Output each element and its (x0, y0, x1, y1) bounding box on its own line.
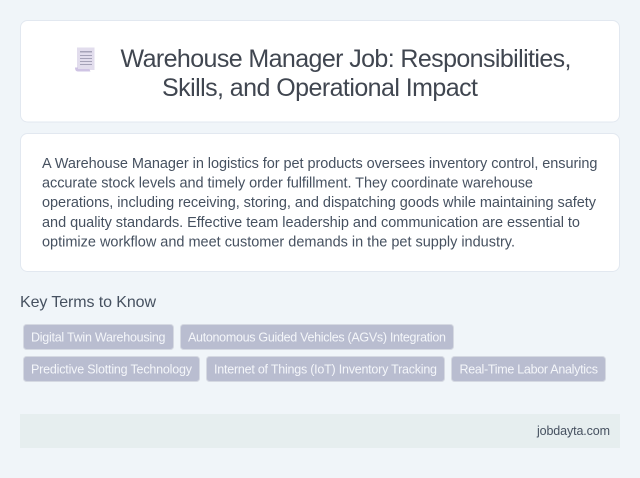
tag: predictive slotting: Predictive Slotting Technology (31, 362, 193, 376)
tag list (24, 324, 606, 382)
tag: IoT tracking: Internet of Things (IoT) Inventory Tracking (214, 362, 437, 376)
tag: predictive slotting (24, 356, 200, 382)
tag: labor analytics: Real-Time Labor Analytics (460, 362, 598, 376)
tag: digital twin: Digital Twin Warehousing (31, 330, 166, 344)
description text (42, 156, 598, 250)
tag: AGVs: Autonomous Guided Vehicles (AGVs) Integration (188, 330, 446, 344)
description text: optimize workflow and meet customer demands in the pet supply industry. (42, 234, 515, 250)
panel: description card (20, 134, 620, 272)
description text: and quality standards. Effective team leadership and communication are essential to (42, 215, 580, 231)
icon: document scroll (75, 48, 94, 72)
tag: IoT tracking (206, 356, 444, 382)
footer bar (20, 414, 620, 448)
tag: digital twin (24, 324, 174, 350)
title (120, 45, 572, 102)
footer source text: jobdayta.com (536, 424, 610, 438)
panel: title card (20, 20, 620, 122)
tag: labor analytics (452, 356, 606, 382)
description text: operations, including receiving, storing, and dispatching goods while maintaining safety (42, 195, 597, 211)
tag: AGVs (180, 324, 454, 350)
title: Skills, and Operational Impact (162, 74, 478, 102)
title: Warehouse Manager Job: Responsibilities, (120, 45, 572, 73)
description text: accurate stock levels and timely order fulfillment. They coordinate warehouse (42, 176, 533, 192)
heading: key terms: Key Terms to Know (20, 294, 156, 311)
description text: A Warehouse Manager in logistics for pet products oversees inventory control, ensuring (42, 156, 598, 172)
